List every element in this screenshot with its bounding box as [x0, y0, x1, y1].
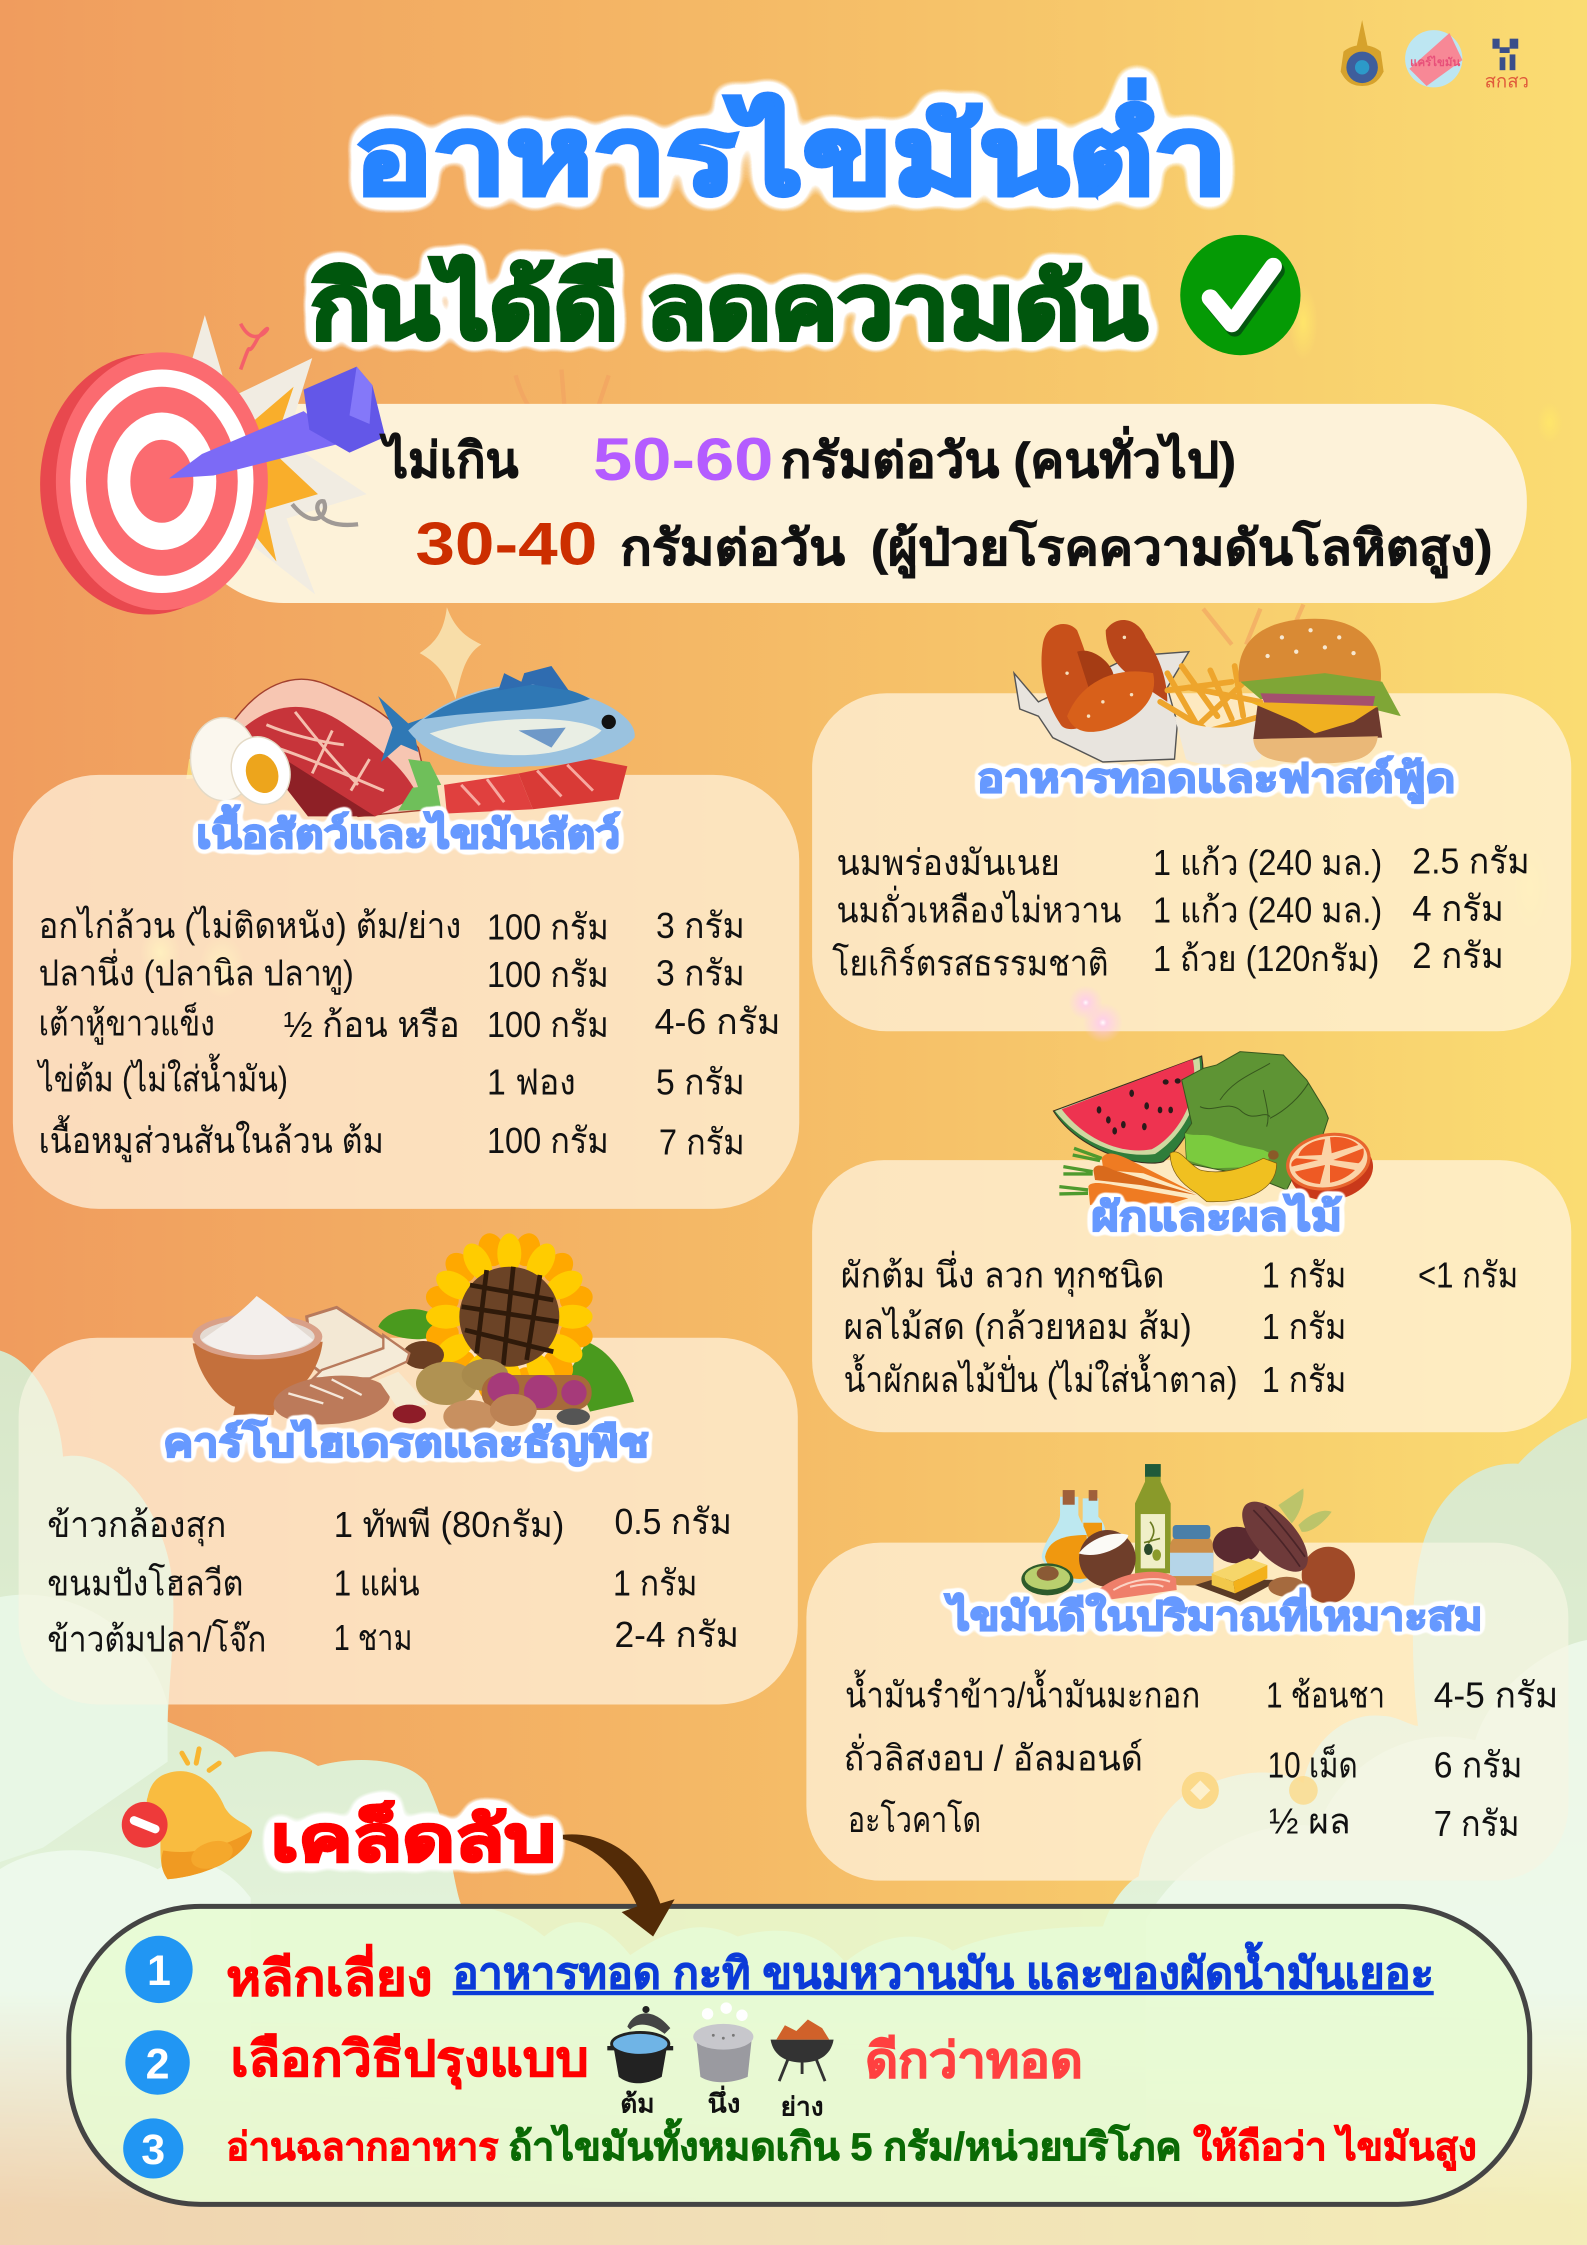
row: avocado: อะโวคาโด: [848, 1799, 981, 1840]
row: low fat milk: นมพร่องมันเนย: [836, 843, 1060, 883]
row: yogurt: [832, 936, 1504, 983]
cooking labels: นึ่ง: [708, 2086, 741, 2119]
tip 3 number: 3: [141, 2126, 165, 2174]
row: steamed fish: ปลานึ่ง (ปลานิล ปลาทู): [39, 948, 354, 994]
tip 2 number: [125, 2030, 190, 2095]
tip 1 number: 1: [147, 1947, 171, 1995]
row: smoothie: น้ำผักผลไม้ปั่น (ไม่ใส่น้ำตาล): [844, 1354, 1238, 1400]
panel: meat and animal fat: [13, 666, 799, 1209]
row: pork tenderloin: 7 กรัม: [659, 1122, 745, 1162]
row: nuts: ถั่วลิสงอบ / อัลมอนด์: [844, 1733, 1143, 1778]
sparkles: [1069, 985, 1123, 1043]
row: chicken breast: อกไก่ล้วน (ไม่ติดหนัง) ต้ม/ย่าง: [39, 905, 461, 946]
row: boiled egg: 5 กรัม: [656, 1062, 745, 1102]
panel backgrounds: [13, 693, 1571, 1881]
row: boiled egg: ไข่ต้ม (ไม่ใส่น้ำมัน): [36, 1053, 288, 1099]
row: steamed fish: 3 กรัม: [656, 953, 745, 993]
tip 3 text: ถ้าไขมันทั้งหมดเกิน 5 กรัม/หน่วยบริโภค: [508, 2118, 1182, 2169]
row: boiled egg: 1 ฟอง: [487, 1062, 576, 1102]
row: chicken breast: [39, 905, 745, 948]
tip 1 text: [226, 1941, 1434, 2006]
row: firm tofu: 100 กรัม: [487, 1005, 609, 1045]
row: low fat milk: 2.5 กรัม: [1412, 842, 1530, 882]
row: nuts: [844, 1733, 1523, 1785]
logo: round pink: แคร์ไขมัน: [1410, 55, 1460, 69]
row: rice bran oil: 4-5 กรัม: [1434, 1675, 1558, 1715]
row: firm tofu: ½ ก้อน หรือ: [284, 1005, 460, 1045]
logo: department: สกสว: [1485, 70, 1529, 91]
icon: steamer: [693, 2002, 753, 2082]
row: low fat milk: [836, 842, 1530, 883]
illustration: wings, fries, burger: [1014, 619, 1401, 764]
row: soy milk: นมถั่วเหลืองไม่หวาน: [836, 885, 1121, 930]
subtitle: กินได้ดี ลดความดัน: [311, 256, 1147, 358]
logos: [1341, 20, 1529, 91]
icon: grill: [771, 2020, 834, 2081]
gold coins: [1182, 1772, 1318, 1809]
logo: round pink: [1405, 30, 1462, 87]
cloud veil over panels: [0, 1351, 1587, 2245]
tips heading: เคล็ดลับ: [271, 1801, 556, 1875]
decorative sparkle: [420, 607, 481, 699]
tip 3 text: ให้ถือว่า ไขมันสูง: [1193, 2124, 1477, 2171]
limit text: general: [379, 426, 1236, 493]
icon: boiling pot: [607, 2006, 673, 2083]
row: yogurt: 2 กรัม: [1412, 936, 1504, 976]
row: pork tenderloin: 100 กรัม: [487, 1121, 609, 1161]
tip 2 conclusion: ดีกว่าทอด: [865, 2034, 1083, 2088]
row: firm tofu: เต้าหู้ขาวแข็ง: [39, 1001, 215, 1045]
panel: tips: [69, 1906, 1530, 2204]
row: yogurt: โยเกิร์ตรสธรรมชาติ: [832, 942, 1109, 983]
cooking labels: [620, 2086, 824, 2122]
tip 2 number: 2: [146, 2040, 170, 2088]
limit text: patients: กรัมต่อวัน: [620, 521, 845, 575]
heading: คาร์โบไฮเดรตและธัญพืช: [163, 1420, 649, 1467]
row: chicken breast: 3 กรัม: [656, 906, 745, 946]
panel: fried and fast food: [812, 619, 1571, 1043]
tip 1 text: อาหารทอด กะทิ ขนมหวานมัน และของผัดน้ำมันเยอะ: [453, 1941, 1434, 1998]
row: firm tofu: [39, 1001, 781, 1045]
limit banner panel: [186, 404, 1527, 603]
fireworks and glow decoration: [140, 285, 1563, 998]
row: soy milk: [836, 885, 1504, 930]
row: whole wheat bread: ขนมปังโฮลวีต: [47, 1563, 243, 1604]
row: nuts: 6 กรัม: [1434, 1745, 1523, 1785]
row: firm tofu: 4-6 กรัม: [655, 1002, 781, 1042]
row: whole wheat bread: 1 กรัม: [613, 1564, 698, 1604]
limit text: patients: [415, 510, 1492, 578]
panel: healthy fats: [806, 1464, 1568, 1881]
limit text: general: ไม่เกิน: [379, 432, 518, 488]
row: boiled egg: [36, 1053, 745, 1102]
row: whole wheat bread: [47, 1563, 698, 1604]
illustration: bowl, bread, sunflower: [192, 1230, 634, 1433]
tip 3 text: อ่านฉลากอาหาร: [226, 2126, 499, 2169]
panel: vegetables and fruit: [812, 1052, 1571, 1432]
row: whole wheat bread: 1 แผ่น: [334, 1564, 420, 1604]
row: rice bran oil: 1 ช้อนชา: [1266, 1675, 1385, 1715]
row: chicken breast: 100 กรัม: [487, 908, 609, 948]
row: fish congee: ข้าวต้มปลา/โจ๊ก: [47, 1618, 266, 1659]
row: brown rice: ข้าวกล้องสุก: [47, 1505, 226, 1546]
lighter cloud layers: [0, 1595, 1587, 2245]
logo: department: [1485, 39, 1529, 91]
icon: check mark: [1180, 235, 1301, 355]
row: boiled vegetables: 1 กรัม: [1262, 1256, 1346, 1296]
row: fresh fruit: 1 กรัม: [1262, 1307, 1346, 1347]
row: rice bran oil: [845, 1669, 1558, 1715]
row: avocado: 7 กรัม: [1434, 1804, 1520, 1844]
illustration: watermelon, greens, carrot, banana, orange: [1053, 1052, 1378, 1207]
limit text: patients: 30-40: [415, 510, 597, 577]
limit text: general: 50-60: [593, 426, 773, 493]
panel: carbohydrates and grains: [19, 1230, 798, 1704]
illustration: oils, avocado, nuts, cacao: [1021, 1464, 1355, 1603]
row: fish congee: 1 ชาม: [334, 1618, 413, 1658]
heading: เนื้อสัตว์และไขมันสัตว์: [196, 805, 620, 857]
cooking labels: ต้ม: [620, 2090, 655, 2119]
icon: bell: [122, 1749, 252, 1879]
row: low fat milk: 1 แก้ว (240 มล.): [1153, 843, 1382, 883]
limit text: general: กรัมต่อวัน (คนทั่วไป): [781, 426, 1236, 488]
row: smoothie: 1 กรัม: [1262, 1360, 1346, 1400]
row: fresh fruit: ผลไม้สด (กล้วยหอม ส้ม): [844, 1306, 1192, 1347]
row: fish congee: [47, 1615, 739, 1659]
row: rice bran oil: น้ำมันรำข้าว/น้ำมันมะกอก: [845, 1669, 1200, 1715]
clouds background: [0, 1351, 1587, 2245]
tip 3 number: [123, 2118, 183, 2179]
row: steamed fish: [39, 948, 745, 995]
heading: ผักและผลไม้: [1091, 1193, 1342, 1239]
bottom warm fade: [0, 2021, 1587, 2245]
tip 1 number: [125, 1936, 193, 2003]
arrow: [563, 1834, 675, 1936]
cooking labels: ย่าง: [781, 2094, 824, 2122]
limit text: patients: (ผู้ป่วยโรคความดันโลหิตสูง): [871, 519, 1492, 578]
row: boiled vegetables: <1 กรัม: [1418, 1256, 1518, 1296]
row: steamed fish: 100 กรัม: [487, 955, 609, 995]
heading: ไขมันดีในปริมาณที่เหมาะสม: [944, 1588, 1482, 1639]
row: boiled vegetables: [841, 1251, 1518, 1297]
tip 3 text: [226, 2118, 1477, 2171]
heading: อาหารทอดและฟาสต์ฟู้ด: [977, 756, 1455, 803]
row: brown rice: 0.5 กรัม: [614, 1502, 732, 1542]
row: pork tenderloin: [39, 1115, 745, 1162]
row: brown rice: 1 ทัพพี (80กรัม): [334, 1505, 564, 1545]
title: อาหารไขมันต่ำ: [354, 79, 1227, 217]
row: nuts: 10 เม็ด: [1268, 1742, 1358, 1785]
tip 1 text: หลีกเลี่ยง: [226, 1944, 433, 2006]
row: yogurt: 1 ถ้วย (120กรัม): [1153, 939, 1379, 979]
row: soy milk: 4 กรัม: [1412, 889, 1504, 929]
row: pork tenderloin: เนื้อหมูส่วนสันในล้วน ต้ม: [39, 1115, 384, 1162]
row: boiled vegetables: ผักต้ม นึ่ง ลวก ทุกชนิด: [841, 1251, 1164, 1297]
row: brown rice: [47, 1502, 732, 1546]
tip 2 text: เลือกวิธีปรุงแบบ: [231, 2032, 589, 2089]
illustration: meat, eggs and fish: [190, 666, 635, 816]
row: avocado: ½ ผล: [1269, 1801, 1351, 1841]
row: soy milk: 1 แก้ว (240 มล.): [1153, 890, 1382, 930]
row: avocado: [848, 1799, 1520, 1844]
row: fish congee: 2-4 กรัม: [614, 1615, 739, 1655]
icon: target with dart: [40, 315, 385, 614]
logo: crest: [1341, 20, 1384, 86]
